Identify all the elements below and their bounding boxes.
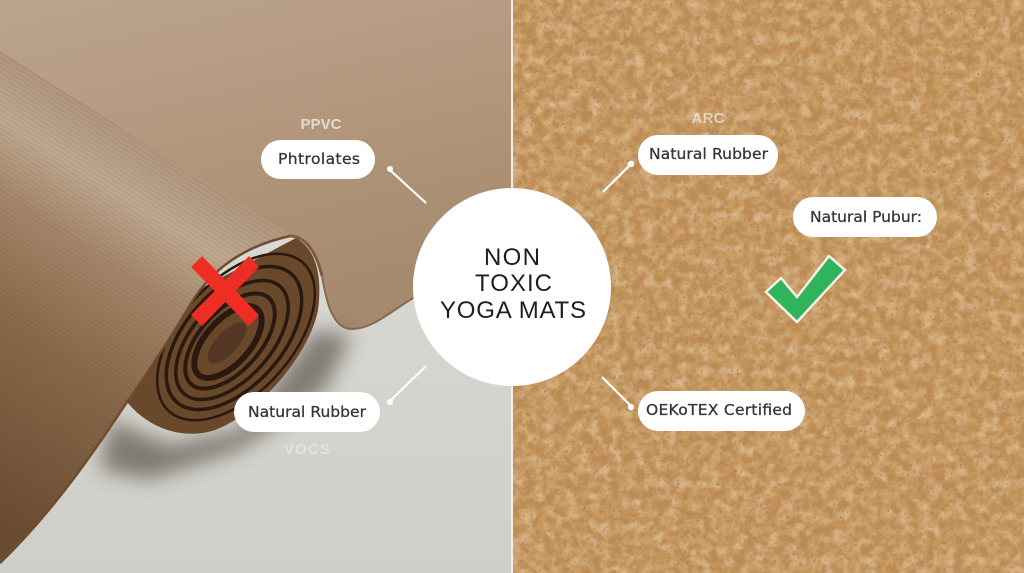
rolled mat surface [0,50,290,563]
panel: cork mat texture (right) [513,0,1024,573]
arrow: to OEKoTEX Certified [602,377,634,410]
arrow: to Phtrolates [387,166,426,203]
title text [440,244,586,324]
pill: Natural Pubur: Natural Pubur: [810,208,922,226]
title text: NON [484,244,540,271]
center divider [511,0,513,573]
title text: YOGA MATS [440,297,586,324]
pill: Phtrolates [261,140,375,179]
panel: PVC mat photo (left) [0,0,512,573]
title circle [413,188,611,386]
title text: TOXIC [475,270,552,297]
label: ARC: ARC [692,110,725,127]
pill: OEKoTEX Certified [638,391,805,431]
label: VOCS: VOCS [284,441,330,458]
pill: Natural Pubur [793,197,937,237]
icon: green check mark [766,256,845,322]
pill: Natural Rubber (right): Natural Rubber [649,145,769,163]
pill: Natural Rubber (right) [638,135,778,175]
arrow: to Natural Rubber (left) [387,366,426,405]
pill: Natural Rubber (left) [234,392,380,432]
roll end spiral [127,225,345,449]
arrow: to Natural Rubber (right) [603,161,634,192]
pill: Natural Rubber (left): Natural Rubber [248,403,367,421]
pill: Phtrolates: Phtrolates [278,150,360,168]
pill: OEKoTEX Certified: OEKoTEX Certified [646,401,792,419]
icon: red cross [191,256,259,326]
label: PPVC: PPVC [300,116,342,133]
